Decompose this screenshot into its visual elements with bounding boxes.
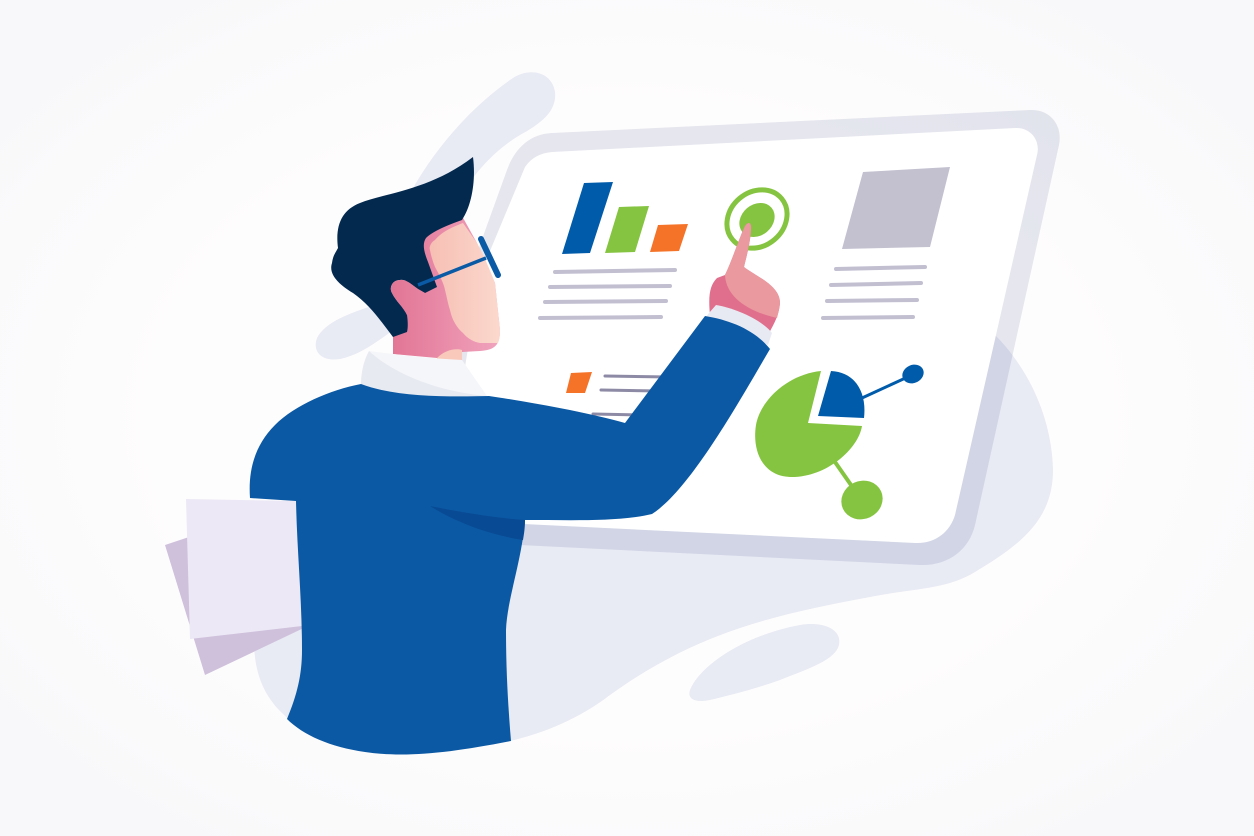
bar chart (562, 182, 688, 254)
text lines under bar chart (540, 270, 675, 318)
neck and head (331, 157, 500, 362)
palm highlight (725, 223, 780, 318)
backdrop blobs (254, 72, 1053, 745)
neck and head skin (393, 216, 500, 360)
blob: large lower (254, 335, 1053, 745)
shirt cuff (705, 305, 772, 345)
orange list bullet (566, 372, 592, 393)
hair (331, 157, 474, 337)
neck shadow (437, 349, 462, 362)
screen panel (440, 128, 1038, 543)
palm (709, 223, 780, 335)
jacket sleeve shadow (430, 506, 525, 540)
blob: small bottom (689, 624, 839, 701)
man's jacket and arm (250, 316, 770, 755)
front sheet (186, 499, 302, 639)
collar (361, 351, 487, 398)
icon: touch target (715, 178, 799, 260)
list lines (593, 376, 670, 415)
pie chart (755, 361, 927, 526)
glasses arm (418, 258, 486, 285)
image placeholder block (842, 167, 950, 249)
back sheet (165, 535, 310, 675)
blob: left behind head (316, 298, 410, 360)
face (430, 223, 500, 343)
ear (391, 280, 425, 315)
screen frame (440, 110, 1060, 565)
papers behind the man (165, 499, 310, 675)
glasses lens edge (481, 239, 498, 275)
blob: upper behind screen (412, 72, 555, 215)
text lines under image block (823, 267, 925, 318)
hand (709, 223, 780, 335)
